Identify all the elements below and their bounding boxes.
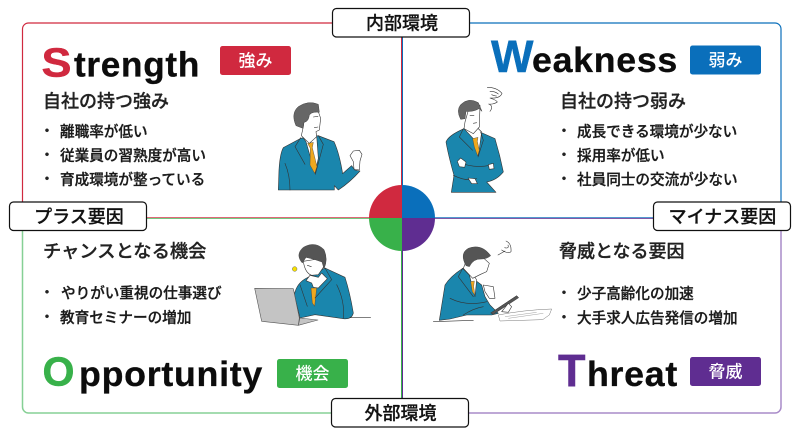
heading: Opportunity [42,348,263,394]
list: opportunity items [40,284,222,326]
list: threat items: 少子高齢化の加速 [577,286,694,302]
list: weakness items: 社員同士の交流が少ない [577,170,738,188]
badge: threat [690,357,761,386]
label: internal environment: 内部環境 [366,14,438,34]
list: strength items: ・ [40,171,54,187]
list: strength items: 離職率が低い [60,122,148,140]
list: opportunity items: やりがい重視の仕事選び [61,284,222,302]
text: strength heading: 自社の持つ強み [43,92,169,112]
heading: Weakness: eakness [532,41,678,80]
badge: opportunity: 機会 [296,364,330,384]
heading: Opportunity: pportunity [79,355,263,394]
list: strength items: 従業員の習熟度が高い [60,146,206,164]
heading: Strength: S [42,40,72,86]
list: threat items: ・ [557,310,571,326]
text: threat heading: 脅威となる要因 [559,242,684,262]
heading: Opportunity: O [42,348,74,394]
heading: Weakness: W [491,31,534,82]
text: weakness heading: 自社の持つ弱み [560,92,686,112]
badge: threat: 脅威 [708,362,742,382]
heading: Threat: T [558,346,586,396]
list: weakness items: 成長できる環境が少ない [577,122,737,140]
list: weakness items [557,122,738,188]
label: external environment: 外部環境 [364,404,436,424]
list: weakness items: ・ [557,147,571,163]
heading: Strength [42,40,200,86]
list: weakness items: 採用率が低い [577,146,665,164]
illustration: businessman with raised fist [278,103,362,190]
illustration: businessman reading phone [433,241,552,322]
badge: strength [220,46,291,75]
list: strength items: 育成環境が整っている [60,170,205,188]
list: opportunity items: ・ [40,284,54,300]
list: opportunity items: ・ [40,309,54,325]
panel frame: weakness quadrant [468,23,781,205]
list: threat items [557,285,738,327]
heading: Threat: hreat [587,355,678,394]
label: external environment [332,398,468,427]
list: opportunity items: 教育セミナーの増加 [60,308,191,326]
center lines [147,37,653,399]
label: negative factors [654,202,790,230]
list: strength items [40,122,206,188]
heading: Weakness [491,31,678,82]
list: weakness items: ・ [557,171,571,187]
illustration: businessman at laptop [255,244,371,325]
list: strength items: ・ [40,123,54,139]
heading: Threat [558,346,678,396]
badge: opportunity [277,359,348,388]
illustration: businessman with crossed arms [446,87,503,192]
badge: strength: 強み [238,52,272,70]
label: positive factors: プラス要因 [34,207,124,227]
list: weakness items: ・ [557,123,571,139]
list: strength items: ・ [40,147,54,163]
text: opportunity heading: チャンスとなる機会 [43,240,206,262]
heading: Strength: trength [74,46,200,84]
list: threat items: 大手求人広告発信の増加 [577,309,738,327]
panel frame: opportunity quadrant [22,230,335,413]
badge: weakness: 弱み [708,51,742,70]
label: positive factors [10,202,146,230]
list: threat items: ・ [557,285,571,301]
badge: weakness [690,46,761,74]
panel frame: strength quadrant [22,23,335,205]
label: internal environment [332,8,470,37]
panel frame: threat quadrant [465,230,781,413]
center four-color circle [369,185,435,251]
label: negative factors: マイナス要因 [669,207,776,227]
